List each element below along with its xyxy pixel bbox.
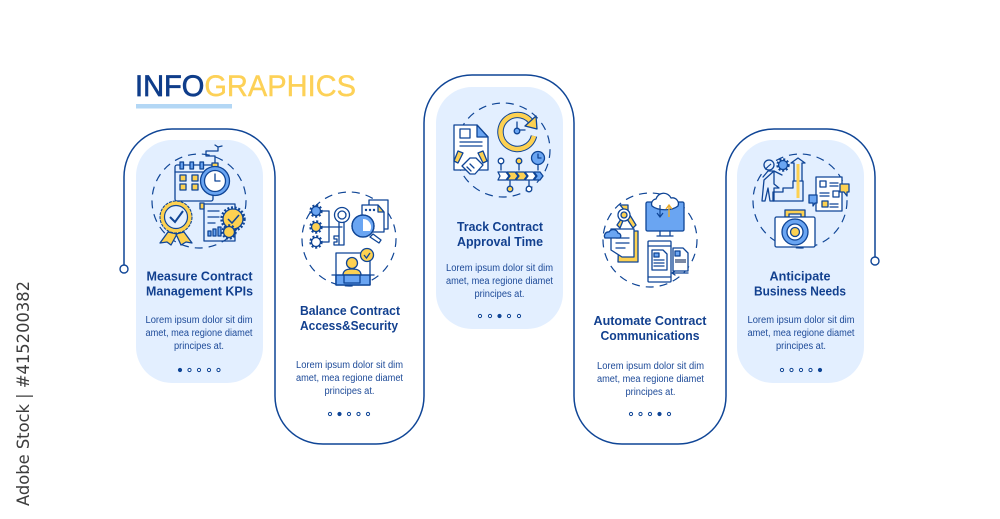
body text: principes at. — [174, 341, 224, 352]
body text: Lorem ipsum dolor sit dim — [146, 315, 252, 326]
body text: amet, mea regione diamet — [597, 374, 704, 385]
connecting outline — [120, 75, 879, 444]
heading — [594, 313, 707, 343]
pagination dots — [478, 314, 521, 318]
panel: Track Contract Approval Time — [436, 87, 563, 329]
pagination dots — [780, 368, 822, 372]
pagination dots — [178, 368, 220, 372]
body text — [146, 315, 253, 352]
body text — [748, 315, 855, 352]
body text: Lorem ipsum dolor sit dim — [597, 361, 704, 372]
heading: Track Contract — [457, 219, 544, 234]
pagination dots — [629, 412, 671, 416]
body text: amet, mea regione diamet — [296, 373, 403, 384]
body text: amet, mea regione diamet — [446, 276, 553, 287]
icon: climbing person, checklist and briefcase eye — [753, 154, 849, 248]
heading: Anticipate — [770, 268, 830, 284]
body text: amet, mea regione diamet — [748, 328, 855, 339]
panel: Measure Contract Management KPIs — [136, 140, 263, 383]
icon: contract, handshake, clock and timeline — [454, 103, 550, 197]
icon: calendar, stopwatch, badge and report — [152, 145, 246, 248]
body text — [597, 361, 704, 398]
body text: principes at. — [776, 341, 826, 352]
heading: Access&Security — [300, 318, 399, 333]
body text: Lorem ipsum dolor sit dim — [296, 360, 403, 371]
stock id label: Adobe Stock | #415200382 — [14, 281, 34, 506]
heading — [754, 268, 846, 298]
heading: Automate Contract — [594, 313, 707, 328]
icon: robot arm, cloud monitor and mobile documents — [603, 193, 697, 287]
title: INFOGRAPHICS: INFOGRAPHICS — [135, 70, 356, 103]
heading: Approval Time — [457, 234, 543, 249]
heading: Communications — [600, 328, 700, 343]
heading: Management KPIs — [146, 284, 253, 298]
panel: Balance Contract Access&Security — [296, 192, 403, 416]
body text: Lorem ipsum dolor sit dim — [748, 315, 854, 326]
body text: principes at. — [626, 387, 676, 398]
heading — [146, 268, 253, 298]
body text: principes at. — [474, 289, 524, 300]
heading — [300, 303, 401, 333]
body text: Lorem ipsum dolor sit dim — [446, 263, 553, 274]
pagination dots — [328, 412, 370, 416]
heading — [457, 219, 544, 249]
body text — [296, 360, 403, 397]
heading: Measure Contract — [146, 268, 253, 284]
icon: keys, documents, magnifier and user — [302, 192, 396, 286]
heading: Business Needs — [754, 284, 846, 298]
panel: Anticipate Business Needs — [737, 140, 864, 383]
body text: principes at. — [324, 386, 374, 397]
body text — [446, 263, 553, 300]
panel: Automate Contract Communications — [594, 193, 707, 416]
body text: amet, mea regione diamet — [146, 328, 253, 339]
heading: Balance Contract — [300, 303, 401, 318]
